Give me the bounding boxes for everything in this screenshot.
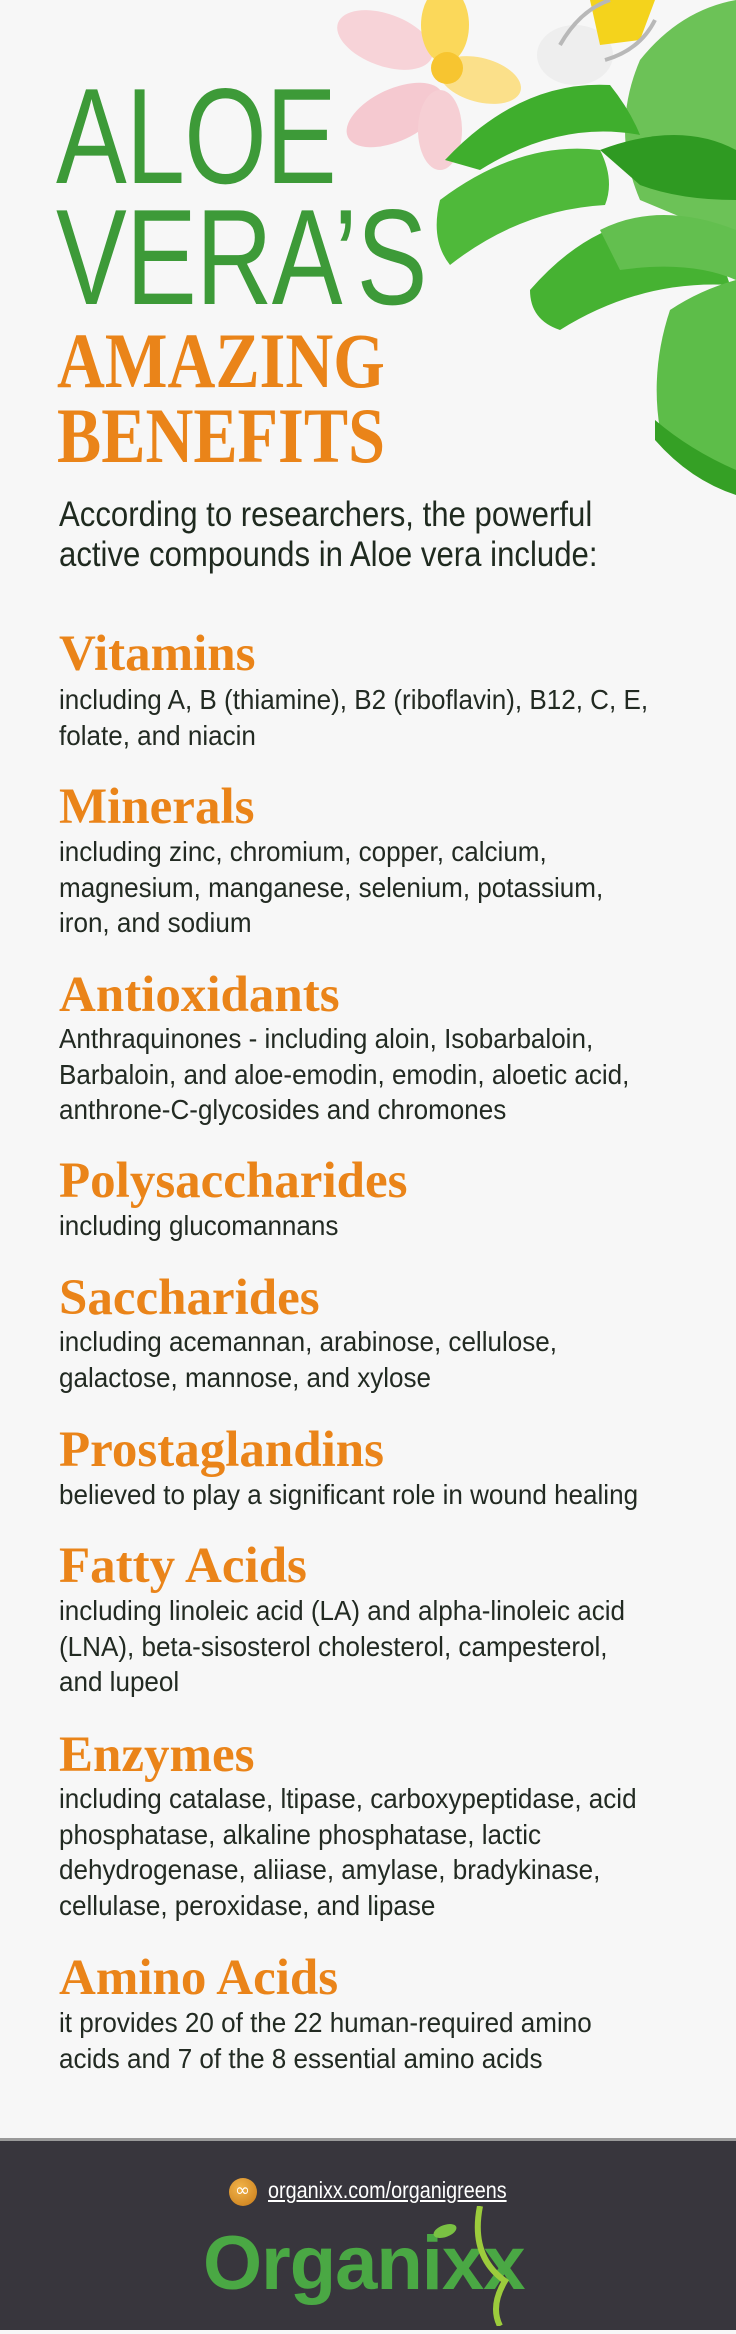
text: VERA’S (56, 181, 427, 333)
text: Polysaccharides (59, 1153, 407, 1209)
intro text (59, 495, 598, 574)
text: galactose, mannose, and xylose (59, 1362, 431, 1392)
text: including zinc, chromium, copper, calcium, (59, 836, 547, 867)
link text: organixx.com/organigreens (268, 2177, 507, 2203)
text: including A, B (thiamine), B2 (riboflavin), B12, C, E, (59, 684, 648, 715)
intro text: active compounds in Aloe vera include: (59, 535, 598, 574)
text: BENEFITS (57, 392, 385, 479)
text: Enzymes (59, 1727, 254, 1783)
section: Saccharides (59, 1270, 557, 1393)
text: including linoleic acid (LA) and alpha-linoleic acid (59, 1595, 625, 1626)
text: Saccharides (59, 1270, 320, 1326)
text: folate, and niacin (59, 720, 256, 750)
text: anthrone-C-glycosides and chromones (59, 1094, 506, 1125)
text: including catalase, ltipase, carboxypeptidase, acid (59, 1783, 637, 1814)
section: Amino Acids (59, 1950, 592, 2074)
text: (LNA), beta-sisosterol cholesterol, campesterol, (59, 1630, 608, 1662)
icon: link: ∞ (235, 2180, 250, 2201)
section: Fatty Acids (59, 1538, 625, 1697)
text: Antioxidants (59, 967, 340, 1023)
text: including acemannan, arabinose, cellulose, (59, 1326, 557, 1357)
text: Minerals (59, 779, 254, 835)
icon: oil bottle (537, 0, 655, 85)
text: it provides 20 of the 22 human-required amino (59, 2007, 592, 2038)
text: and lupeol (59, 1666, 179, 1697)
icon: flower (329, 0, 526, 170)
text: AMAZING (57, 317, 385, 404)
text: phosphatase, alkaline phosphatase, lactic (59, 1818, 541, 1850)
text: Fatty Acids (59, 1538, 307, 1594)
text: magnesium, manganese, selenium, potassium, (59, 872, 603, 902)
subtitle: AMAZING BENEFITS (57, 317, 385, 479)
text: including glucomannans (59, 1210, 338, 1241)
section: Vitamins (59, 626, 648, 750)
text: iron, and sodium (59, 907, 252, 938)
text: Amino Acids (59, 1950, 338, 2006)
section: Prostaglandins (59, 1422, 638, 1510)
text: acids and 7 of the 8 essential amino acids (59, 2042, 542, 2074)
logo: Organixx: Organixx (203, 2221, 524, 2306)
footer (0, 2138, 736, 2330)
section: Minerals (59, 779, 603, 938)
text: believed to play a significant role in wound healing (59, 1479, 638, 1510)
text: Prostaglandins (59, 1422, 384, 1478)
section: Enzymes (59, 1727, 637, 1921)
text: Vitamins (59, 626, 255, 682)
section: Polysaccharides (59, 1153, 407, 1241)
icon: aloe leaves (437, 0, 736, 495)
text: cellulase, peroxidase, and lipase (59, 1890, 435, 1920)
illustration: aloe leaves and flower (337, 0, 736, 495)
icon: leaf (434, 2206, 509, 2326)
icon: link (229, 2178, 257, 2206)
text: ALOE (56, 60, 336, 212)
text: Anthraquinones - including aloin, Isobarbaloin, (59, 1023, 593, 1054)
intro text: According to researchers, the powerful (59, 495, 592, 534)
title: ALOE VERA'S (56, 60, 427, 333)
text: Barbaloin, and aloe-emodin, emodin, aloetic acid, (59, 1058, 629, 1090)
text: dehydrogenase, aliiase, amylase, bradykinase, (59, 1854, 600, 1885)
section: Antioxidants (59, 967, 629, 1125)
